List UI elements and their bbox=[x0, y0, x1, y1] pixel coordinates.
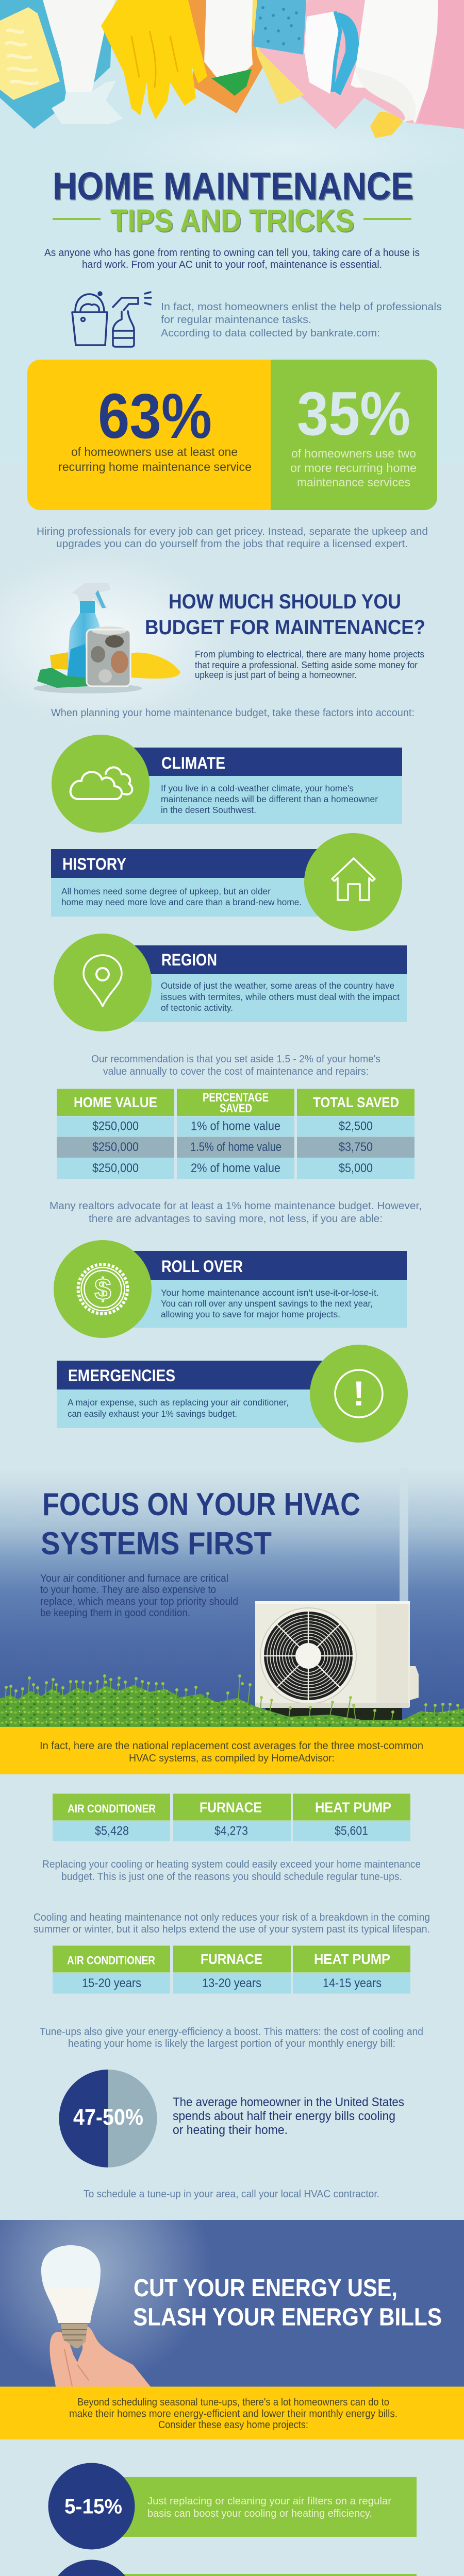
intro paragraph: hard work. From your AC unit to your roof, maintenance is essential. bbox=[82, 259, 382, 270]
heading: how much should you budget: HOW MUCH SHOULD YOU bbox=[169, 590, 401, 613]
text: replacing your system: Replacing your cooling or heating system could easily exceed your home maintenance bbox=[42, 1859, 421, 1870]
spray bottle body bbox=[67, 613, 101, 678]
photo: air conditioner outside wall bbox=[0, 1468, 464, 1727]
yellow band: easy projects: make their homes more energy-efficient and lower their monthly energy bills. bbox=[69, 2408, 397, 2419]
table: home value savings: $2,500 bbox=[339, 1119, 373, 1133]
intro callout text: In fact, most homeowners enlist the help of professionals bbox=[161, 301, 442, 313]
table: replacement costs: HEAT PUMP bbox=[315, 1799, 391, 1816]
text: from plumbing to electrical: that require a professional. Setting aside some money for bbox=[195, 659, 418, 670]
yellow sponge bbox=[0, 7, 60, 100]
text: from plumbing to electrical: From plumbing to electrical, there are many home projects bbox=[195, 649, 424, 659]
heading: focus on hvac: SYSTEMS FIRST bbox=[41, 1526, 272, 1562]
icon: house bbox=[332, 858, 375, 900]
large white bottle with yellow cap bbox=[351, 0, 438, 138]
yellow stat: of homeowners use at least one bbox=[71, 445, 238, 459]
hand bbox=[50, 2327, 151, 2386]
panel: region: issues with termites, while others must deal with the impact bbox=[161, 992, 400, 1002]
table: replacement costs: $5,428 bbox=[95, 1824, 129, 1838]
yellow band: replacement costs: In fact, here are the national replacement cost averages for the three most-common bbox=[40, 1740, 423, 1752]
tip: 5-15% air filters bbox=[48, 2463, 417, 2549]
wall bbox=[0, 1468, 464, 1727]
table: home value savings: $3,750 bbox=[339, 1140, 373, 1154]
table: replacement costs: FURNACE bbox=[200, 1799, 262, 1816]
table: home value savings bbox=[57, 1089, 415, 1179]
panel: roll over: ROLL OVER bbox=[161, 1257, 243, 1276]
table: replacement costs: AIR CONDITIONER bbox=[68, 1802, 156, 1815]
panel: climate bbox=[52, 735, 402, 833]
blue cloth bbox=[0, 0, 112, 129]
chart: 47-50% half circle bbox=[59, 2070, 157, 2167]
table: home value savings: HOME VALUE bbox=[74, 1094, 157, 1110]
panel: emergencies: A major expense, such as replacing your air conditioner, bbox=[68, 1397, 289, 1408]
spray head bbox=[72, 583, 111, 609]
text: average homeowner energy bills: spends about half their energy bills cooling bbox=[173, 2109, 395, 2123]
panel: climate: If you live in a cold-weather climate, your home's bbox=[161, 783, 354, 793]
table: home value savings: TOTAL SAVED bbox=[313, 1094, 399, 1110]
panel: climate: in the desert Southwest. bbox=[161, 805, 256, 815]
table: replacement costs: $4,273 bbox=[214, 1824, 248, 1838]
text: average homeowner energy bills: The average homeowner in the United States bbox=[173, 2095, 404, 2109]
yellow band: easy projects: Consider these easy home projects: bbox=[158, 2419, 308, 2431]
icon: bucket and spray bottle bbox=[72, 292, 151, 347]
banner heading: CUT YOUR ENERGY USE, bbox=[134, 2275, 397, 2302]
blue sponge bbox=[253, 0, 306, 55]
paragraph: hiring professionals bbox=[37, 526, 428, 550]
yellow band: replacement costs: HVAC systems, as compiled by HomeAdvisor: bbox=[129, 1753, 335, 1764]
text: air conditioner and furnace: to your home. They are also expensive to bbox=[40, 1584, 216, 1596]
tip: 5-15% air filters: basis can boost your cooling or heating efficiency. bbox=[147, 2508, 372, 2519]
pink cloth bbox=[246, 0, 464, 129]
text: recommendation: Our recommendation is that you set aside 1.5 - 2% of your home's bbox=[91, 1054, 380, 1065]
panel: region: REGION bbox=[161, 951, 217, 969]
heading: how much should you budget bbox=[145, 590, 425, 639]
header photo: cleaning supplies bbox=[0, 0, 464, 138]
green stat bbox=[271, 360, 437, 510]
green cloth bbox=[37, 668, 90, 688]
tip: 5-15% air filters: Just replacing or cleaning your air filters on a regular bbox=[147, 2496, 391, 2507]
intro callout text: for regular maintenance tasks. bbox=[161, 314, 311, 326]
table: system lifespans: 14-15 years bbox=[323, 1976, 382, 1990]
text: planning factors intro: When planning your home maintenance budget, take these factors into account: bbox=[51, 707, 415, 719]
text: air conditioner and furnace: be keeping them in good condition. bbox=[40, 1607, 190, 1619]
table: home value savings: PERCENTAGE bbox=[203, 1091, 269, 1105]
white detergent bottle bbox=[204, 0, 253, 77]
text: tune-ups boost bbox=[40, 2026, 423, 2049]
yellow cloth bbox=[246, 0, 304, 105]
photo: spray bottle, coin jar and gloves bbox=[34, 583, 180, 693]
yellow stat: 63% bbox=[98, 381, 212, 452]
yellow band: easy projects bbox=[0, 2386, 464, 2439]
icon: clouds bbox=[71, 767, 132, 799]
scrub brush bbox=[304, 11, 359, 95]
panel: climate: CLIMATE bbox=[161, 754, 225, 772]
table: system lifespans: AIR CONDITIONER bbox=[67, 1954, 155, 1967]
subtitle rule right bbox=[363, 218, 411, 220]
chart: 47-50% half circle: 47-50% bbox=[73, 2105, 143, 2130]
grass bbox=[0, 1676, 464, 1727]
icon: exclamation mark bbox=[335, 1370, 383, 1417]
paragraph: hiring professionals: upgrades you can do yourself from the jobs that require a licensed expert. bbox=[56, 538, 408, 550]
title bbox=[53, 164, 413, 238]
text: tune-ups boost: heating your home is likely the largest portion of your monthly energy bill: bbox=[68, 2038, 395, 2049]
table: home value savings: SAVED bbox=[220, 1101, 252, 1115]
panel: history: HISTORY bbox=[62, 855, 126, 873]
shadow under unit bbox=[266, 1706, 402, 1725]
orange cloth bbox=[186, 0, 263, 113]
heading: how much should you budget: BUDGET FOR MAINTENANCE? bbox=[145, 616, 425, 639]
table: replacement costs: $5,601 bbox=[335, 1824, 368, 1838]
table: system lifespans: 13-20 years bbox=[202, 1976, 261, 1990]
ac unit bbox=[255, 1601, 419, 1708]
table: home value savings: 1.5% of home value bbox=[190, 1140, 281, 1154]
panel: roll over bbox=[54, 1240, 407, 1338]
table: replacement costs bbox=[53, 1794, 410, 1841]
text: from plumbing to electrical bbox=[195, 649, 424, 680]
intro callout text bbox=[161, 301, 442, 339]
text: from plumbing to electrical: upkeep is just part of being a homeowner. bbox=[195, 669, 357, 680]
text: tune-ups boost: Tune-ups also give your energy-efficiency a boost. This matters: the cost of cooling and bbox=[40, 2026, 423, 2038]
table: home value savings: $250,000 bbox=[92, 1161, 139, 1175]
table: system lifespans: FURNACE bbox=[201, 1951, 262, 1967]
table: home value savings: $5,000 bbox=[339, 1161, 373, 1175]
table: home value savings: $250,000 bbox=[92, 1140, 139, 1154]
text: average homeowner energy bills: or heating their home. bbox=[173, 2123, 288, 2137]
yellow gloves behind bbox=[130, 653, 180, 679]
coin jar bbox=[87, 626, 130, 686]
text: recommendation: value annually to cover the cost of maintenance and repairs: bbox=[103, 1066, 369, 1077]
subtitle: tips and tricks: TIPS AND TRICKS bbox=[110, 203, 354, 238]
text: air conditioner and furnace: Your air conditioner and furnace are critical bbox=[40, 1572, 228, 1584]
panel: region: of tectonic activity. bbox=[161, 1003, 233, 1013]
text: air conditioner and furnace bbox=[40, 1572, 238, 1619]
panel: emergencies bbox=[57, 1345, 408, 1443]
yellow rubber gloves bbox=[101, 0, 207, 120]
intro callout text: According to data collected by bankrate.com: bbox=[161, 328, 380, 339]
table: system lifespans bbox=[53, 1945, 410, 1994]
panel: history bbox=[51, 833, 402, 931]
yellow band: easy projects: Beyond scheduling seasonal tune-ups, there's a lot homeowners can do to bbox=[77, 2397, 389, 2408]
green stat: 35% bbox=[297, 379, 410, 448]
panel: emergencies: EMERGENCIES bbox=[68, 1366, 175, 1385]
text: average homeowner energy bills bbox=[173, 2095, 404, 2137]
green stat: maintenance services bbox=[297, 476, 410, 489]
banner heading bbox=[133, 2275, 442, 2331]
panel: roll over: allowing you to save for major home projects. bbox=[161, 1309, 340, 1319]
table: system lifespans: 15-20 years bbox=[82, 1976, 141, 1990]
text: cooling and heating maintenance bbox=[34, 1912, 430, 1935]
icon: exclamation mark: ! bbox=[353, 1374, 364, 1413]
text: cooling and heating maintenance: Cooling and heating maintenance not only reduces your risk of a breakdown in the coming bbox=[34, 1912, 430, 1923]
text: cooling and heating maintenance: summer or winter, but it also helps extend the use of your system past its typical lifespan. bbox=[34, 1924, 430, 1935]
intro paragraph bbox=[44, 247, 420, 270]
panel: roll over: You can roll over any unspent savings to the next year, bbox=[161, 1298, 373, 1309]
yellow band: replacement costs bbox=[0, 1727, 464, 1774]
text: replacing your system: budget. This is just one of the reasons you should schedule regular tune-ups. bbox=[61, 1871, 402, 1883]
panel: energy banner with light bulb bbox=[0, 2220, 464, 2386]
panel: history: All homes need some degree of upkeep, but an older bbox=[61, 886, 271, 896]
text: recommendation bbox=[91, 1054, 380, 1077]
paragraph: hiring professionals: Hiring professionals for every job can get pricey. Instead, separate the upkeep and bbox=[37, 526, 428, 537]
panel: region: Outside of just the weather, some areas of the country have bbox=[161, 980, 394, 991]
panel: region bbox=[54, 934, 407, 1031]
text: many realtors advocate bbox=[49, 1200, 422, 1225]
panel: roll over: Your home maintenance account isn't use-it-or-lose-it. bbox=[161, 1287, 379, 1298]
text: replacing your system bbox=[42, 1859, 421, 1883]
green cap bbox=[211, 69, 252, 96]
table: home value savings: 2% of home value bbox=[191, 1161, 280, 1175]
text: air conditioner and furnace: replace, which means your top priority should bbox=[40, 1596, 238, 1607]
icon: map pin bbox=[84, 955, 122, 1006]
yellow stat: recurring home maintenance service bbox=[58, 460, 252, 473]
tip: 5-15% air filters: 5-15% bbox=[64, 2496, 122, 2518]
icon: dollar coin: $ bbox=[94, 1273, 111, 1306]
yellow stat bbox=[27, 360, 271, 510]
panel: bankrate statistics bbox=[27, 360, 437, 510]
text: schedule a tune-up: To schedule a tune-up in your area, call your local HVAC contractor. bbox=[84, 2189, 379, 2200]
green stat: of homeowners use two bbox=[291, 447, 416, 460]
heading: focus on hvac: FOCUS ON YOUR HVAC bbox=[42, 1486, 360, 1522]
white spray bottle bbox=[43, 0, 115, 93]
panel: climate: maintenance needs will be different than a homeowner bbox=[161, 794, 378, 804]
table: system lifespans: HEAT PUMP bbox=[314, 1951, 390, 1967]
table: home value savings: 1% of home value bbox=[191, 1119, 280, 1133]
icon: dollar coin bbox=[78, 1264, 128, 1314]
panel: emergencies: can easily exhaust your 1% savings budget. bbox=[68, 1409, 237, 1419]
light bulb bbox=[41, 2245, 101, 2348]
text: many realtors advocate: there are advantages to saving more, not less, if you are able: bbox=[89, 1213, 383, 1225]
pipe bbox=[400, 1468, 408, 1602]
green stat: or more recurring home bbox=[290, 461, 417, 474]
text: many realtors advocate: Many realtors advocate for at least a 1% home maintenance budget. However, bbox=[49, 1200, 422, 1212]
table: home value savings: $250,000 bbox=[92, 1119, 139, 1133]
intro paragraph: As anyone who has gone from renting to owning can tell you, taking care of a house is bbox=[44, 247, 420, 259]
panel: history: home may need more love and care than a brand-new home. bbox=[61, 897, 302, 907]
heading: focus on hvac bbox=[41, 1486, 360, 1562]
subtitle rule left bbox=[53, 218, 101, 220]
title line: home maintenance: HOME MAINTENANCE bbox=[53, 164, 413, 208]
tip: 10% thermostat bbox=[48, 2560, 417, 2576]
